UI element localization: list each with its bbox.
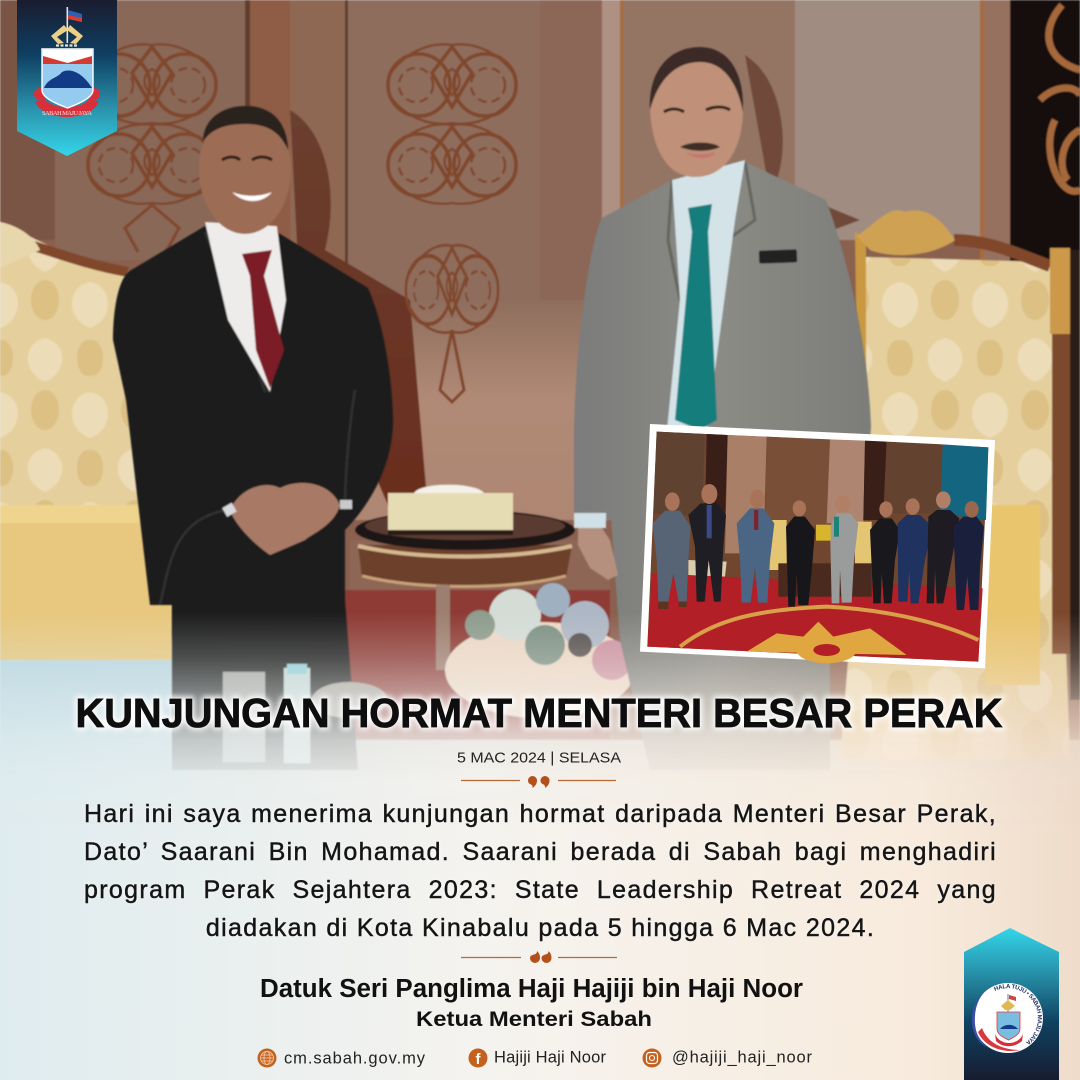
carpet floor — [340, 590, 610, 760]
right man: hand — [574, 513, 618, 580]
bottom pale gradient fade — [0, 620, 1080, 1080]
right man: pocket badge — [759, 249, 797, 264]
inset group photo — [640, 424, 995, 668]
icon: globe — [258, 1048, 276, 1068]
side table — [355, 510, 575, 670]
divider: opening quote — [461, 776, 616, 788]
date line: 5 MAC 2024 | SELASA — [457, 750, 621, 766]
black ornament panel — [1040, 5, 1080, 191]
icon: facebook: f — [476, 1051, 482, 1068]
left man: shirt — [205, 222, 286, 392]
icon: round badge — [972, 983, 1043, 1053]
title: KUNJUNGAN HORMAT MENTERI BESAR PERAK — [76, 690, 1003, 736]
speaker role: Ketua Menteri Sabah — [416, 1008, 652, 1031]
quote paragraph: Hari ini saya menerima kunjungan hormat daripada Menteri Besar Perak, — [84, 800, 997, 828]
carved center panel — [388, 44, 516, 402]
speaker name: Datuk Seri Panglima Haji Hajiji bin Haji Noor — [260, 975, 803, 1003]
left man: tie — [242, 250, 284, 388]
right man: tie — [675, 204, 717, 430]
quote paragraph: diadakan di Kota Kinabalu pada 5 hingga 6 Mac 2024. — [206, 914, 875, 942]
quote paragraph: program Perak Sejahtera 2023: State Leadership Retreat 2024 yang — [84, 876, 997, 904]
contact: facebook: Hajiji Haji Noor — [494, 1048, 606, 1066]
title glow: KUNJUNGAN HORMAT MENTERI BESAR PERAK — [76, 690, 1003, 736]
quote paragraph — [84, 800, 997, 942]
right man: suit — [574, 162, 871, 770]
divider: closing quote — [461, 951, 617, 963]
right man: shirt — [667, 160, 745, 430]
white photo frame — [640, 424, 995, 668]
icon: motto scroll: SABAH MAJU JAYA — [42, 110, 92, 117]
icon: motto scroll — [34, 88, 100, 117]
icon: state shield — [42, 49, 93, 108]
right man: head — [650, 47, 743, 177]
tissue box — [388, 485, 513, 535]
flowers — [445, 583, 635, 718]
quote paragraph: Dato’ Saarani Bin Mohamad. Saarani berada di Sabah bagi menghadiri — [84, 838, 997, 866]
top-left ribbon with state crest — [17, 0, 117, 156]
carved left panel — [88, 44, 216, 252]
left man: head — [199, 106, 291, 234]
glass and bottle — [223, 664, 388, 763]
left man: hands — [222, 483, 352, 555]
head shadows on wall — [290, 110, 428, 510]
contact: instagram: @hajiji_haji_noor — [672, 1048, 812, 1066]
left man: suit — [113, 226, 393, 770]
icon: round badge: HALA TUJU • SABAH MAJU JAYA — [994, 984, 1042, 1044]
delegation of nine men — [653, 484, 984, 610]
right chair — [840, 232, 1070, 760]
icon: instagram — [642, 1048, 662, 1068]
left chair — [0, 222, 175, 720]
icon: flag and hands — [51, 7, 83, 46]
bottom-right ribbon with round logo — [964, 928, 1059, 1080]
neutral floor under the fade — [0, 740, 1080, 1080]
lower wall behind table — [348, 300, 608, 520]
contact: website: cm.sabah.gov.my — [284, 1050, 426, 1068]
